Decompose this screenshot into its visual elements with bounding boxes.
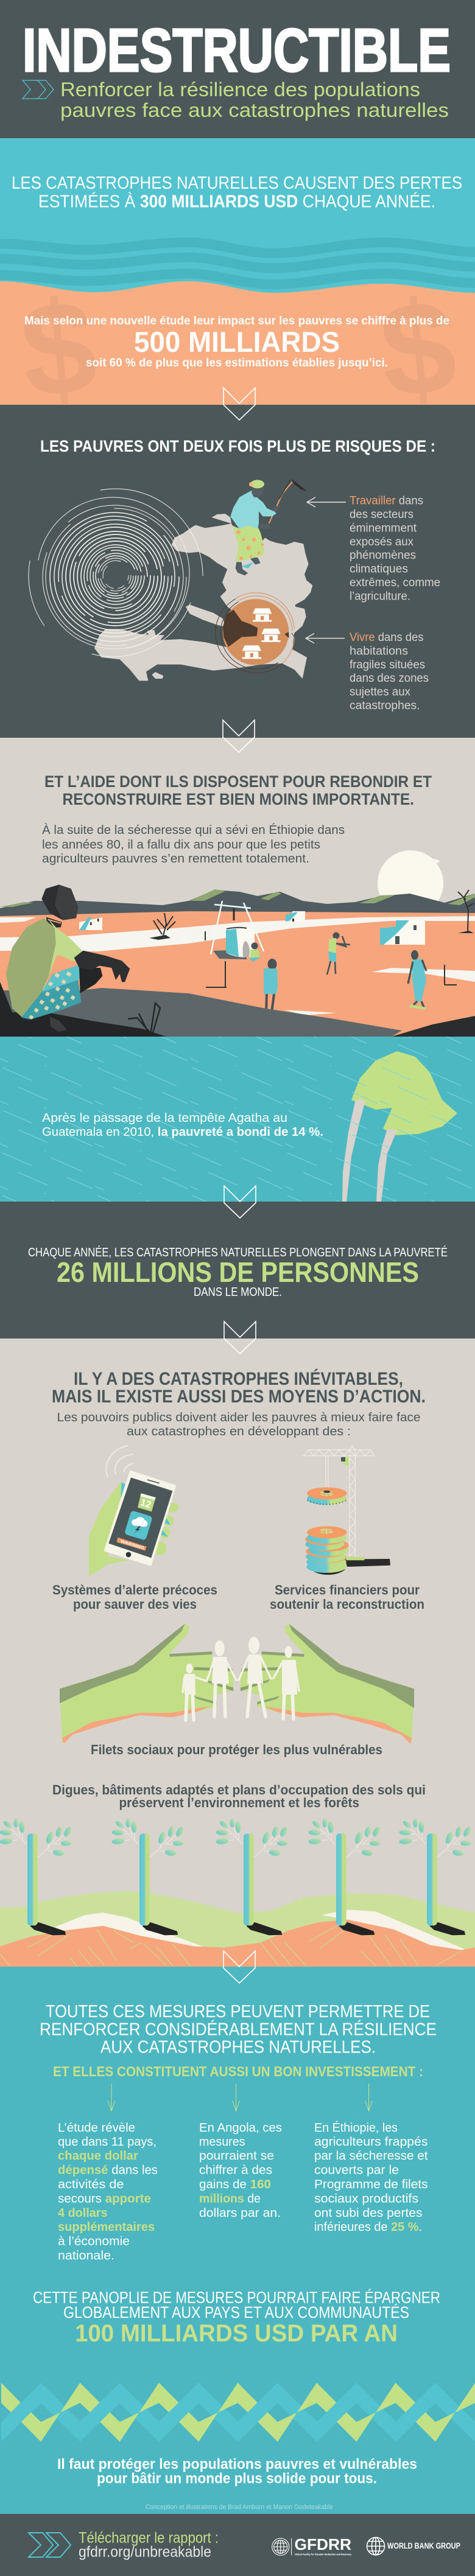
coin: hanging <box>307 1487 347 1505</box>
family <box>183 1637 299 1720</box>
icon: double chevron <box>23 80 54 99</box>
house: far <box>286 911 305 922</box>
subtitle <box>60 79 449 121</box>
tree <box>111 1819 185 1935</box>
arrow: to Vivre <box>306 634 345 643</box>
text: public authorities: Les pouvoirs publics doivent aider les pauvres à mieux faire face <box>57 1411 420 1424</box>
subheading: ET ELLES CONSTITUENT AUSSI UN BON INVESTISSEMENT : <box>53 2063 423 2079</box>
heading <box>44 772 432 808</box>
illustration: drought landscape <box>0 850 475 1037</box>
icon: dollar sign left: $ <box>14 271 103 427</box>
text: Agatha storm <box>42 1111 323 1139</box>
logo: GFDRR <box>272 2535 352 2556</box>
column: eleven countries: activités de <box>58 2178 124 2191</box>
icon: dollar sign right: $ <box>373 271 462 427</box>
heading: LES PAUVRES ONT DEUX FOIS PLUS DE RISQUES DE : <box>40 437 435 455</box>
panel: 500 billion impact <box>0 271 475 427</box>
green hill <box>0 1891 475 1967</box>
label: dikes and buildings: préservent l’environnement et les forêts <box>119 1795 359 1810</box>
panel: twice the risks <box>0 405 475 738</box>
tree <box>216 1819 289 1935</box>
label: social safety nets: Filets sociaux pour protéger les plus vulnérables <box>91 1742 382 1757</box>
panel: header <box>0 0 475 138</box>
text: Vivre: dans des zones <box>350 672 429 685</box>
arrow: down 3 <box>365 2084 373 2111</box>
panel: good investment <box>0 1967 475 2514</box>
text: Travailler: Travailler dans <box>350 495 423 508</box>
heading: MAIS IL EXISTE AUSSI DES MOYENS D’ACTION. <box>52 1387 426 1407</box>
well <box>211 901 264 959</box>
arrow: chevron 2 <box>223 720 255 752</box>
column: Ethiopia: En Éthiopie, les <box>314 2121 398 2135</box>
text: download report: Télécharger le rapport : <box>79 2530 219 2547</box>
column: eleven countries: à l’économie <box>58 2235 130 2249</box>
text: closing statement: pour bâtir un monde plus solide pour tous. <box>97 2470 377 2487</box>
label: warning systems <box>52 1583 217 1612</box>
column: Angola: gains de 160 <box>199 2178 271 2191</box>
column: eleven countries: nationale. <box>58 2249 114 2263</box>
tree <box>399 1819 472 1935</box>
warning banner: WARNING <box>120 1539 145 1550</box>
weather tile <box>124 1510 153 1541</box>
text: Travailler: phénomènes <box>350 549 416 562</box>
column: Ethiopia: par la sécheresse et <box>314 2149 428 2163</box>
label: financial services <box>270 1583 424 1612</box>
panel: less help to rebuild <box>0 738 475 1037</box>
logo: GFDRR: Global Facility for Disaster Reduction and Recovery <box>295 2553 352 2556</box>
text: Ethiopia drought <box>42 823 345 866</box>
text: Travailler: des secteurs <box>350 508 413 521</box>
hand: left <box>60 1624 233 1744</box>
foreground rock left <box>0 982 166 1037</box>
arrow: chevron 3 <box>224 1186 256 1218</box>
text: Travailler: exposés aux <box>350 536 413 548</box>
column: eleven countries: que dans 11 pays, <box>58 2135 157 2149</box>
heading: ET L’AIDE DONT ILS DISPOSENT POUR REBONDIR ET <box>44 772 432 791</box>
zigzag band <box>1 2382 475 2441</box>
heading <box>52 1368 426 1407</box>
column: Ethiopia <box>314 2121 428 2234</box>
icon: palm trees <box>342 1051 457 1202</box>
column: Angola: En Angola, ces <box>199 2121 282 2135</box>
column: eleven countries: dépensé dans les <box>58 2163 158 2177</box>
icon: double chevron <box>29 2533 71 2557</box>
figure: woman farmer with hoe <box>230 479 307 575</box>
coin stack: $ <box>320 1527 334 1535</box>
label: dikes and buildings: Digues, bâtiments adaptés et plans d’occupation des sols qui <box>52 1782 426 1797</box>
text: worldwide: DANS LE MONDE. <box>194 1286 282 1299</box>
label: warning systems: Systèmes d’alerte précoces <box>52 1583 217 1597</box>
column: Angola: millions de <box>199 2193 261 2206</box>
heading: RENFORCER CONSIDÉRABLEMENT LA RÉSILIENCE <box>40 2020 437 2039</box>
map: Haiti with village circle <box>94 514 312 681</box>
column: Angola: dollars par an. <box>199 2207 281 2220</box>
text: losses statement <box>12 173 462 212</box>
warning banner <box>117 1538 147 1551</box>
text: measures could save: GLOBALEMENT AUX PAYS ET AUX COMMUNAUTÉS <box>63 2303 409 2322</box>
logo: World Bank Group <box>367 2537 460 2555</box>
heading: IL Y A DES CATASTROPHES INÉVITABLES, <box>74 1368 403 1389</box>
hills <box>0 890 475 919</box>
illustration: hills with trees <box>0 1819 475 1967</box>
label: warning systems: pour sauver des vies <box>73 1597 197 1612</box>
text: Ethiopia drought: les années 80, il a fallu dix ans pour que les petits <box>42 838 320 852</box>
big number: 500 MILLIARDS <box>134 326 340 358</box>
column: Ethiopia: ont subi des pertes <box>314 2207 423 2220</box>
column: eleven countries: secours apporte <box>58 2193 151 2206</box>
coin stack <box>305 1526 349 1573</box>
subtitle: Renforcer la résilience des populations <box>60 79 420 100</box>
illustration: phone alert <box>89 1446 180 1577</box>
road <box>0 916 475 982</box>
column: Ethiopia: Programme de filets <box>314 2178 427 2191</box>
icon: house <box>261 629 281 642</box>
column: Angola: pourraient se <box>199 2149 274 2163</box>
column: Ethiopia: sociaux productifs <box>314 2193 418 2206</box>
logo: GFDRR: GFDRR <box>295 2535 351 2553</box>
text: Vivre: catastrophes. <box>350 699 420 712</box>
label: dikes and buildings <box>52 1782 426 1810</box>
column: Ethiopia: agriculteurs frappés <box>314 2135 427 2149</box>
link: gfdrr.org/unbreakable <box>79 2543 211 2560</box>
big number: 100 MILLIARDS USD PAR AN <box>75 2320 398 2347</box>
child by well <box>242 941 261 962</box>
coin: hanging: $ <box>320 1489 334 1497</box>
house: left <box>79 917 102 930</box>
column: eleven countries: chaque dollar <box>58 2149 138 2163</box>
text: Travailler: climatiques <box>350 563 408 576</box>
text: impact comparison: soit 60 % de plus que les estimations établies jusqu’ici. <box>86 357 388 369</box>
big number: 26 MILLIONS DE PERSONNES <box>57 1256 419 1288</box>
label: financial services: Services financiers pour <box>275 1583 420 1597</box>
calendar icon: 12 <box>139 1497 152 1511</box>
waves <box>0 242 475 284</box>
column: eleven countries: 4 dollars <box>58 2207 107 2220</box>
text: Travailler <box>350 495 440 603</box>
text: Vivre: habitations <box>350 645 408 657</box>
icon: house <box>242 645 261 659</box>
hand: right <box>241 1624 414 1744</box>
dead trees and sticks <box>153 890 474 987</box>
text: Vivre: fragiles situées <box>350 659 425 671</box>
tree <box>308 1819 381 1935</box>
heading <box>40 2002 437 2057</box>
arrow: down 1 <box>108 2084 115 2111</box>
column: Ethiopia: inférieures de 25 %. <box>314 2221 422 2234</box>
text: Vivre: Vivre dans des <box>350 631 424 644</box>
woman walking <box>408 950 426 1010</box>
heading: AUX CATASTROPHES NATURELLES. <box>100 2038 376 2057</box>
child with pickaxe <box>327 933 350 975</box>
text: Travailler: extrêmes, comme <box>350 576 440 589</box>
text: Agatha storm: Après le passage de la tempête Agatha au <box>42 1111 287 1125</box>
sand ridge and ground <box>0 1909 475 1967</box>
text: closing statement <box>57 2456 417 2487</box>
illustration: crane and coins <box>303 1446 390 1575</box>
subtitle: pauvres face aux catastrophes naturelles <box>60 99 449 121</box>
seated person in foreground <box>6 884 130 1032</box>
logo: World Bank Group: WORLD BANK GROUP <box>387 2541 460 2550</box>
arrow: down 2 <box>233 2084 240 2111</box>
child standing <box>245 959 278 1021</box>
panel: footer <box>0 2514 475 2576</box>
tree <box>0 1819 72 1935</box>
text: closing statement: Il faut protéger les populations pauvres et vulnérables <box>57 2456 417 2473</box>
text: credits: Conception et illustrations de Brad Amburn et Manon Godeteakable <box>146 2504 333 2511</box>
column: eleven countries: supplémentaires <box>58 2221 155 2234</box>
text: Vivre: sujettes aux <box>350 686 410 699</box>
circle: fragile housing zone <box>216 593 295 673</box>
panel: Guatemala storm <box>0 1037 475 1202</box>
house: right <box>380 920 425 945</box>
heading: RECONSTRUIRE EST BIEN MOINS IMPORTANTE. <box>62 790 414 808</box>
label: financial services: soutenir la reconstruction <box>270 1597 424 1612</box>
panel: 26 million <box>0 1202 475 1339</box>
illustration: protecting hands and family <box>60 1624 414 1744</box>
foreground grey slope <box>0 988 402 1037</box>
text: measures could save <box>33 2289 440 2322</box>
panel: 300 billion losses <box>0 138 475 296</box>
text: Vivre <box>350 631 429 712</box>
arrow: chevron 4 <box>224 1321 256 1354</box>
text: Travailler: éminemment <box>350 522 417 534</box>
column: Ethiopia: couverts par le <box>314 2163 399 2177</box>
heading: TOUTES CES MESURES PEUVENT PERMETTRE DE <box>46 2002 430 2021</box>
ground <box>0 911 475 1037</box>
column: eleven countries: L’étude révèle <box>58 2121 135 2135</box>
calendar icon <box>138 1493 156 1511</box>
text: Travailler: l’agriculture. <box>350 590 410 603</box>
text: public authorities <box>57 1411 420 1438</box>
column: Angola: chiffrer à des <box>199 2163 272 2177</box>
text: Ethiopia drought: agriculteurs pauvres s’en remettent totalement. <box>42 852 309 866</box>
text: impact intro: Mais selon une nouvelle étude leur impact sur les pauvres se chiffre à plus de <box>24 315 449 327</box>
column: Angola <box>199 2121 282 2220</box>
panel: means of action <box>0 1339 475 1967</box>
text: losses statement: ESTIMÉES À 300 MILLIARDS USD CHAQUE ANNÉE. <box>38 191 435 212</box>
foreground rock right <box>392 1016 475 1037</box>
icon: hurricane spiral <box>0 455 237 697</box>
text: Ethiopia drought: À la suite de la sécheresse qui a sévi en Éthiopie dans <box>42 823 345 837</box>
column: eleven countries <box>58 2121 158 2263</box>
column: Angola: mesures <box>199 2135 245 2149</box>
text: public authorities: aux catastrophes en développant des : <box>127 1425 351 1438</box>
sun <box>378 850 443 916</box>
plant <box>128 1003 160 1035</box>
arrow: chevron 5 <box>223 1951 255 1983</box>
text: Agatha storm: Guatemala en 2010, la pauvreté a bondi de 14 %. <box>42 1125 323 1139</box>
arrow: to Travailler <box>307 497 346 507</box>
arrow: chevron 1 <box>223 388 255 420</box>
icon: house <box>253 608 272 621</box>
